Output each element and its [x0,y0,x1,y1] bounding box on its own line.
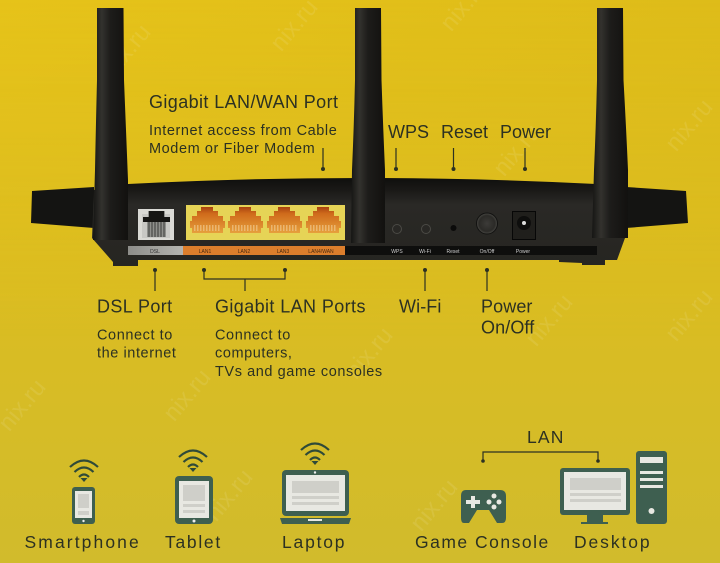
watermarks: nix.ru [405,474,463,536]
right label strip: On/Off [480,249,495,255]
icon: tablet [175,476,213,524]
callout: Gigabit LAN Ports: computers, [215,346,293,362]
LAN label strip [183,246,345,255]
callout: Gigabit LAN/WAN Port: Gigabit LAN/WAN Port [149,92,338,112]
icon: tower [636,451,667,524]
LAN label strip: LAN3 [277,249,289,255]
callout: DSL Port: the internet [97,346,177,362]
LAN bracket [481,427,600,463]
label: Game Console: Game Console [415,532,550,552]
watermarks: nix.ru [158,364,216,426]
Wi-Fi button [422,224,430,234]
watermarks: nix.ru [340,322,398,384]
callout: DSL Port: Connect to [97,328,173,344]
callout: Power: Power [500,122,551,142]
label: Smartphone: Smartphone [24,532,141,552]
label: Desktop: Desktop [574,532,652,552]
WPS button [392,224,402,234]
callout: Wi-Fi: Wi-Fi [399,296,441,316]
right label strip [345,246,597,255]
callout: WPS: WPS [388,122,429,142]
power switch [476,213,498,234]
port LAN3 [267,207,302,233]
device: laptop [280,444,351,552]
icon: wifi [70,460,98,482]
icon: gamepad [461,490,506,523]
router body [92,178,628,266]
left antenna [93,8,128,240]
LAN bracket: LAN [527,427,565,447]
watermarks: nix.ru [98,19,156,81]
callout: Gigabit LAN/WAN Port: Internet access from Cable [149,123,337,139]
DSL label strip [128,246,183,255]
right wing [626,187,688,228]
icon: wifi [301,444,329,465]
DSL port [138,209,174,240]
right label strip: Reset [446,249,460,255]
callout: Power On/Off [481,268,535,338]
callout: Power On/Off: On/Off [481,318,535,338]
right label strip: WPS [391,249,403,255]
LAN label strip: LAN1 [199,249,211,255]
callout: Reset: Reset [441,122,488,142]
left wing [31,187,94,228]
callout: Gigabit LAN Ports: Gigabit LAN Ports [215,296,366,316]
icon: laptop [280,470,351,524]
callout: Gigabit LAN/WAN Port [149,92,338,171]
watermarks: nix.ru [660,94,718,156]
right antenna [592,8,628,238]
watermarks: nix.ru [660,284,718,346]
callout: Power [500,122,551,171]
port LAN2 [228,207,263,233]
right label strip: Power [516,249,530,255]
callout: Gigabit LAN Ports: TVs and game consoles [215,364,383,380]
router [31,8,688,266]
DSL label strip: DSL [150,249,160,255]
callout: Gigabit LAN/WAN Port: Modem or Fiber Modem [149,141,315,157]
background [0,366,720,563]
callout: WPS [388,122,429,171]
LAN label strip: LAN2 [238,249,250,255]
power jack [512,212,536,240]
right label strip: Wi-Fi [419,249,431,255]
icon: wifi [179,450,207,472]
icon: phone [72,487,95,524]
Reset hole [450,225,456,231]
callout: Gigabit LAN Ports: Connect to [215,328,291,344]
watermarks: nix.ru [200,464,258,526]
callout: Power On/Off: Power [481,296,533,316]
device: smartphone [24,460,141,552]
LAN ports panel [186,205,345,240]
callout: Wi-Fi [399,268,441,316]
label: Tablet: Tablet [165,532,222,552]
callout: DSL Port: DSL Port [97,296,173,316]
centre antenna [351,8,385,243]
device: tablet [165,450,222,552]
watermarks: nix.ru [520,289,578,351]
callout: Reset [441,122,488,171]
callout: DSL Port [97,268,177,362]
label: Laptop: Laptop [282,532,346,552]
port LAN4/WAN [306,207,341,233]
LAN label strip: LAN4/WAN [308,249,334,255]
icon: monitor [560,468,630,524]
port LAN1 [190,207,225,233]
watermarks: nix.ru [488,119,546,181]
callout: Gigabit LAN Ports [202,268,383,380]
device: desktop [560,451,667,552]
device: game console [415,490,550,552]
